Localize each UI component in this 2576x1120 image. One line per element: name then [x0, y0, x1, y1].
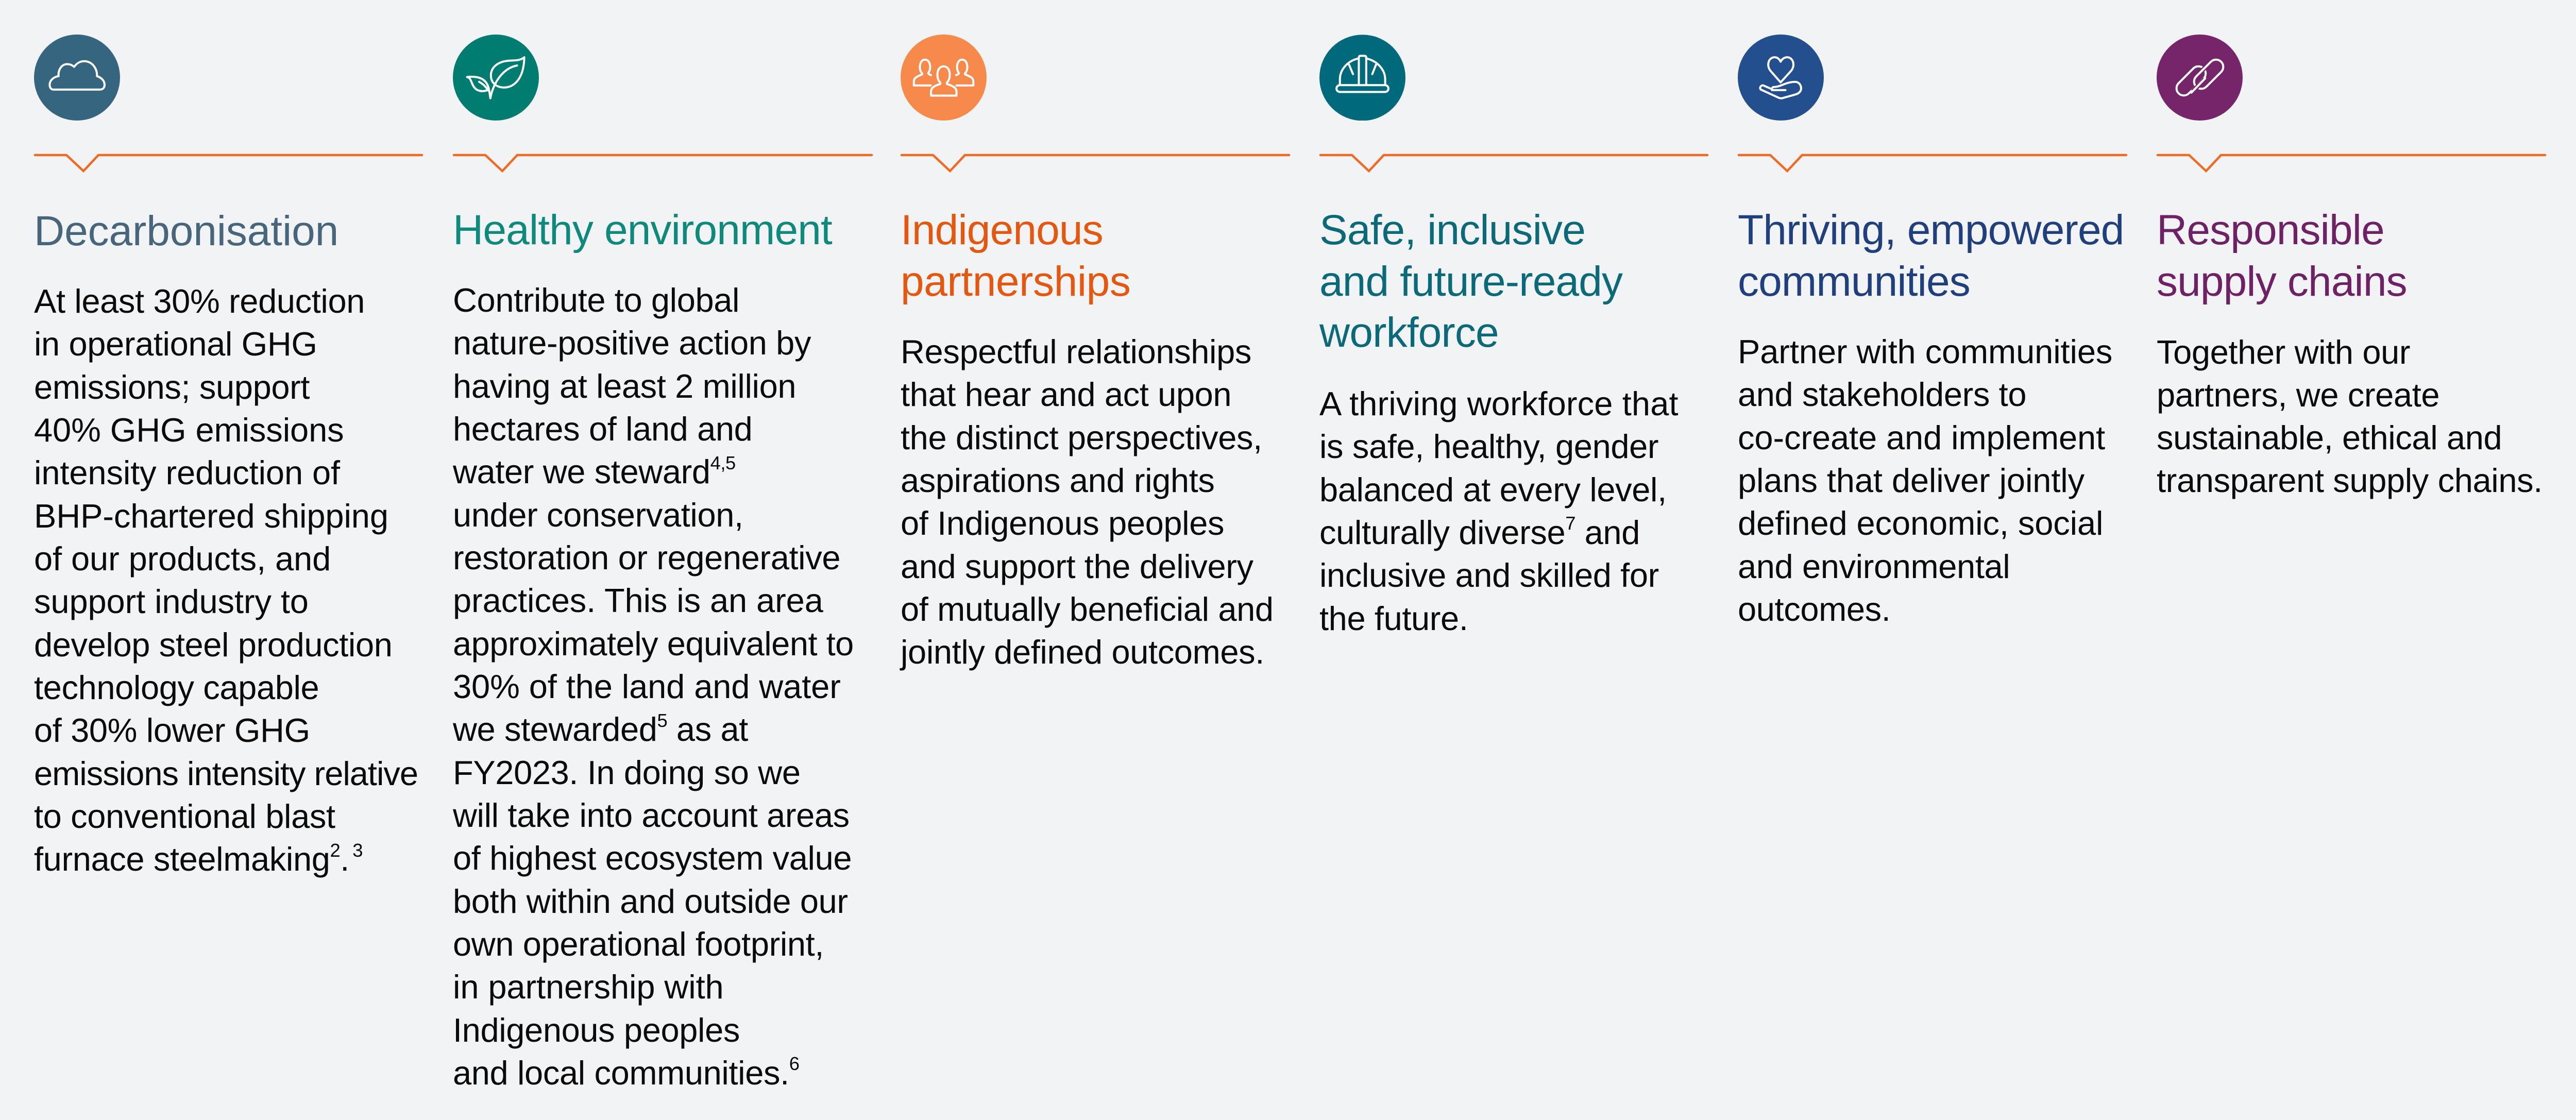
panel: indigenous partnerships	[900, 35, 1290, 671]
body text: nature-positive action by	[453, 324, 811, 362]
body text	[900, 333, 1274, 671]
heading: Indigenous partnerships: Indigenous	[901, 207, 1103, 253]
panel: safe, inclusive and future-ready workforce	[1319, 35, 1708, 637]
body text: Respectful relationships	[901, 333, 1251, 370]
heading: Safe, inclusive and future-ready workforce: workforce	[1319, 309, 1499, 356]
heading: Indigenous partnerships	[901, 207, 1130, 305]
panel: responsible supply chains	[2157, 0, 2548, 1120]
body text: restoration or regenerative	[453, 539, 840, 576]
heading: Responsible supply chains: supply chains	[2157, 258, 2407, 305]
body text: practices. This is an area	[453, 582, 823, 619]
body text: defined economic, social	[1738, 504, 2103, 542]
body text	[1738, 330, 2112, 631]
panel: decarbonisation	[34, 35, 423, 878]
panel: healthy environment	[452, 35, 873, 1092]
heading: Thriving, empowered communities: communities	[1738, 258, 1970, 305]
body text: that hear and act upon	[901, 376, 1231, 413]
body text: both within and outside our	[453, 883, 848, 920]
body text: FY2023. In doing so we	[453, 754, 801, 791]
heading: Thriving, empowered communities	[1738, 205, 2124, 307]
body text: and local communities.6	[453, 1053, 800, 1092]
body text: to conventional blast	[34, 797, 335, 835]
body text: furnace steelmaking2.3	[34, 840, 363, 878]
body text: will take into account areas	[453, 796, 850, 834]
icon: chain links	[2157, 34, 2243, 121]
body text: having at least 2 million	[453, 367, 796, 405]
body text	[2157, 331, 2543, 502]
body text: approximately equivalent to	[453, 625, 854, 663]
divider with notch	[2157, 152, 2546, 175]
icon: people	[901, 35, 987, 121]
panel: thriving, empowered communities	[1738, 0, 2129, 1120]
divider with notch	[452, 154, 873, 173]
body text: BHP-chartered shipping	[34, 497, 388, 535]
divider with notch	[901, 154, 1290, 173]
body text: water we steward4,5	[453, 452, 736, 490]
body text: sustainable, ethical and	[2157, 419, 2502, 456]
body text: own operational footprint,	[453, 925, 824, 963]
body text: emissions intensity relative	[34, 755, 418, 792]
body text: transparent supply chains.	[2157, 462, 2543, 499]
body text: jointly defined outcomes.	[901, 633, 1264, 671]
body text: of our products, and	[34, 540, 331, 578]
heading: Indigenous partnerships: partnerships	[901, 258, 1130, 305]
heading: Healthy environment: Healthy environment	[453, 207, 832, 253]
body text: develop steel production	[34, 626, 393, 664]
body text: of mutually beneficial and	[901, 590, 1274, 628]
divider with notch	[34, 154, 423, 173]
body text: outcomes.	[1738, 590, 1890, 628]
heading: Decarbonisation: Decarbonisation	[34, 208, 338, 254]
body text: Together with our	[2157, 333, 2410, 371]
body text: culturally diverse7 and	[1319, 513, 1640, 551]
icon: leaves	[453, 35, 539, 121]
body text: aspirations and rights	[901, 462, 1215, 499]
body text: and environmental	[1738, 548, 2010, 585]
icon: cloud	[34, 35, 120, 121]
body text: support industry to	[34, 583, 309, 620]
body text: Contribute to global	[453, 281, 739, 319]
body text: of 30% lower GHG	[34, 711, 310, 749]
body text: of Indigenous peoples	[901, 504, 1224, 542]
body text: is safe, healthy, gender	[1319, 428, 1658, 465]
body text: emissions; support	[34, 368, 310, 406]
body text: co-create and implement	[1738, 419, 2105, 456]
icon: hard hat	[1319, 35, 1405, 121]
body text: balanced at every level,	[1319, 471, 1667, 508]
body text: and stakeholders to	[1738, 376, 2026, 413]
body text: the future.	[1319, 600, 1468, 637]
body text: and support the delivery	[901, 548, 1253, 585]
body text: Indigenous peoples	[453, 1011, 740, 1049]
body text: of highest ecosystem value	[453, 839, 852, 877]
body text: under conservation,	[453, 496, 743, 534]
body text	[452, 281, 854, 1092]
body text: 30% of the land and water	[453, 668, 841, 705]
divider with notch	[1319, 154, 1708, 173]
body text	[34, 282, 418, 878]
body text: hectares of land and	[453, 410, 752, 448]
body text: intensity reduction of	[34, 454, 340, 491]
heading: Responsible supply chains	[2157, 205, 2407, 307]
body text: in partnership with	[453, 968, 724, 1006]
body text: 40% GHG emissions	[34, 411, 344, 449]
body text: we stewarded5 as at	[453, 710, 748, 748]
divider with notch	[1738, 152, 2127, 175]
icon: hand holding heart	[1738, 34, 1824, 121]
body text	[1319, 382, 1679, 640]
body text: in operational GHG	[34, 325, 317, 363]
heading: Safe, inclusive and future-ready workforce: Safe, inclusive	[1319, 207, 1585, 253]
body text: A thriving workforce that	[1319, 385, 1679, 422]
heading: Thriving, empowered communities: Thriving, empowered	[1738, 207, 2124, 253]
body text: technology capable	[34, 669, 319, 706]
body text: Partner with communities	[1738, 333, 2112, 370]
heading: Safe, inclusive and future-ready workforce: and future-ready	[1319, 258, 1622, 305]
body text: inclusive and skilled for	[1319, 556, 1659, 594]
body text: partners, we create	[2157, 376, 2439, 414]
heading: Responsible supply chains: Responsible	[2157, 207, 2384, 253]
heading: Safe, inclusive and future-ready workforce	[1319, 207, 1623, 356]
body text: plans that deliver jointly	[1738, 462, 2084, 499]
body text: the distinct perspectives,	[901, 419, 1262, 456]
body text: At least 30% reduction	[34, 282, 365, 320]
